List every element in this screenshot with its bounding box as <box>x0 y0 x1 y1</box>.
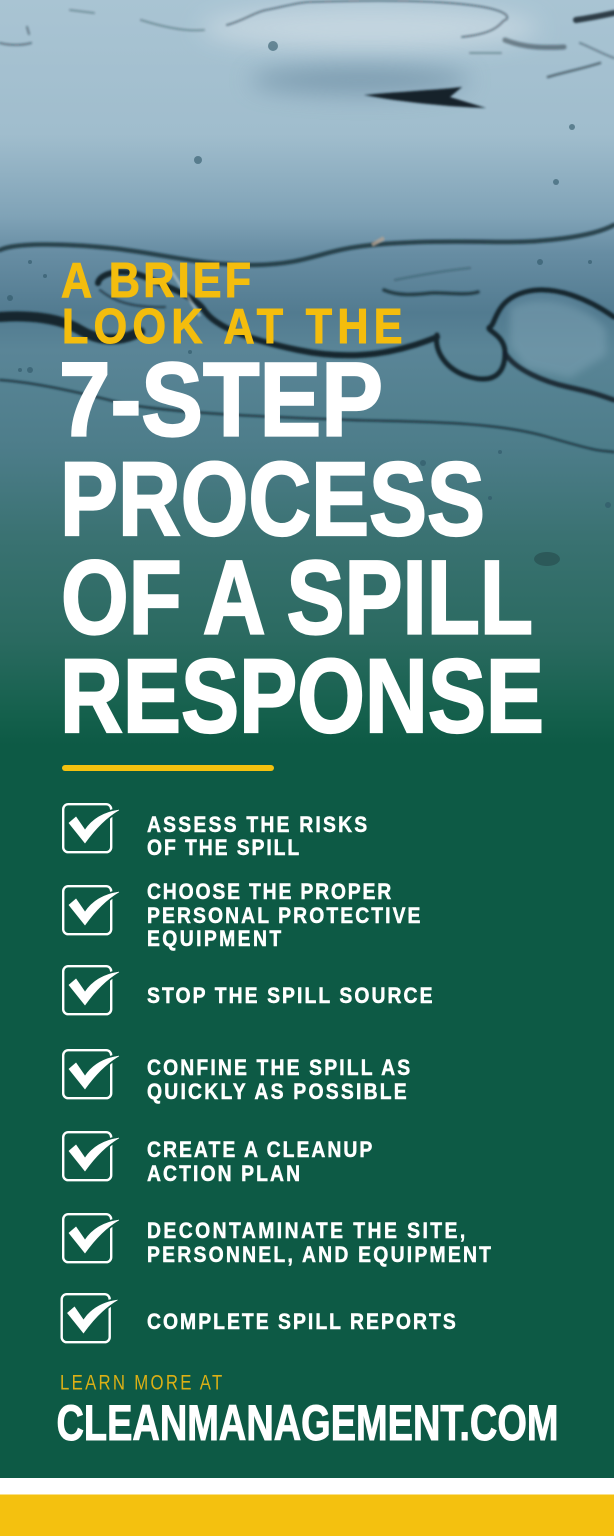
main title <box>59 342 544 755</box>
step text: EQUIPMENT <box>147 927 281 951</box>
step text: CHOOSE THE PROPER <box>147 880 391 904</box>
step text: CONFINE THE SPILL AS <box>147 1056 410 1080</box>
step text: QUICKLY AS POSSIBLE <box>147 1080 407 1104</box>
step 6 <box>63 1214 491 1267</box>
step text: OF THE SPILL <box>147 836 299 860</box>
step 3 <box>63 966 433 1014</box>
yellow divider <box>62 765 274 771</box>
step text <box>147 1138 372 1186</box>
icon: checkbox <box>63 886 119 934</box>
step 1 <box>63 804 367 860</box>
step text <box>147 880 420 951</box>
step text <box>147 1056 410 1104</box>
heading: a brief look at the <box>61 252 403 354</box>
main title: 7-STEP <box>59 342 383 458</box>
step text: CREATE A CLEANUP <box>147 1138 372 1162</box>
icon: checkbox <box>63 1214 119 1262</box>
step text <box>147 1219 491 1267</box>
step text: PERSONAL PROTECTIVE <box>147 904 420 928</box>
step text: ASSESS THE RISKS <box>147 813 367 837</box>
step text: STOP THE SPILL SOURCE <box>147 984 433 1008</box>
step 7 <box>62 1294 456 1342</box>
step text: ACTION PLAN <box>147 1162 300 1186</box>
step 2 <box>63 880 420 951</box>
step text: DECONTAMINATE THE SITE, <box>147 1219 465 1243</box>
photo background: oil spill surface <box>0 0 614 745</box>
icon: checkbox <box>63 1050 119 1098</box>
icon: checkbox <box>63 804 119 852</box>
step text <box>147 813 367 860</box>
icon: checkbox <box>63 1132 119 1180</box>
step 5 <box>63 1132 372 1186</box>
green panel <box>0 745 614 1478</box>
learn more label: LEARN MORE AT <box>60 1372 222 1395</box>
heading: a brief look at the: LOOK AT THE <box>62 298 403 354</box>
checklist <box>62 804 491 1342</box>
step text: COMPLETE SPILL REPORTS <box>147 1310 456 1334</box>
main title: OF A SPILL <box>61 540 533 656</box>
heading: a brief look at the: A BRIEF <box>61 252 251 308</box>
step text: PERSONNEL, AND EQUIPMENT <box>147 1243 491 1267</box>
icon: checkbox <box>62 1294 118 1342</box>
main title: PROCESS <box>60 441 485 558</box>
step 4 <box>63 1050 410 1104</box>
yellow footer band <box>0 1494 614 1536</box>
icon: checkbox <box>63 966 119 1014</box>
white band <box>0 1478 614 1495</box>
